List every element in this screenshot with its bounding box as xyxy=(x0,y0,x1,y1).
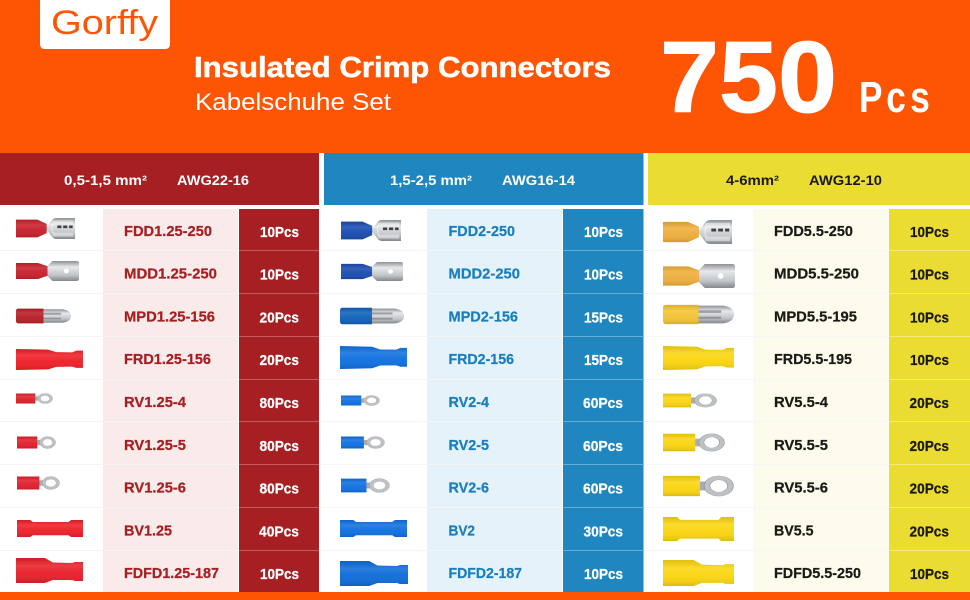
row: FDFD1.25-187: FDFD1.25-187 xyxy=(124,565,219,582)
row: RV1.25-4: 80Pcs xyxy=(260,395,299,412)
row: RV1.25-5: RV1.25-5 xyxy=(124,437,186,454)
row: MPD5.5-195: 10Pcs xyxy=(910,310,949,326)
subtitle: Kabelschuhe Set xyxy=(195,89,391,116)
row: RV1.25-4: RV1.25-4 xyxy=(124,394,187,411)
row: MPD5.5-195 xyxy=(663,305,949,326)
row: MDD2-250 xyxy=(341,262,623,284)
row: MPD1.25-156 xyxy=(16,308,299,326)
row: FRD1.25-156: FRD1.25-156 xyxy=(124,351,211,368)
row: FRD2-156: 15Pcs xyxy=(584,352,623,369)
row: FDD2-250 xyxy=(341,220,623,241)
row: RV5.5-5 xyxy=(663,434,949,455)
row: BV5.5: 20Pcs xyxy=(910,524,949,540)
row: BV1.25 xyxy=(17,520,299,540)
row: FRD2-156 xyxy=(340,346,623,369)
row: RV5.5-6: RV5.5-6 xyxy=(774,480,828,496)
row: FDFD5.5-250 xyxy=(663,560,949,586)
row: MDD2-250: MDD2-250 xyxy=(448,266,520,282)
row: FDD1.25-250 xyxy=(16,218,299,241)
row: RV5.5-6 xyxy=(663,476,949,498)
row: MDD2-250: 10Pcs xyxy=(584,266,623,284)
row: RV1.25-4 xyxy=(16,393,299,412)
row: FRD5.5-195 xyxy=(663,346,949,370)
row: FRD5.5-195: 10Pcs xyxy=(910,352,949,369)
row: BV5.5 xyxy=(663,517,949,541)
row: BV5.5: BV5.5 xyxy=(774,522,814,540)
row: MDD5.5-250: MDD5.5-250 xyxy=(774,266,859,282)
row: RV5.5-5: 20Pcs xyxy=(910,438,949,455)
row: RV5.5-5: RV5.5-5 xyxy=(774,437,828,454)
row: FDD5.5-250 xyxy=(663,220,949,244)
header: blue column: AWG16-14 xyxy=(502,173,576,188)
row: MDD5.5-250: 10Pcs xyxy=(910,266,949,284)
panel: 4-6 mm² yellow column xyxy=(644,153,970,592)
row: MDD1.25-250 xyxy=(16,261,299,284)
logo badge: Gorffy xyxy=(51,4,158,42)
header: blue column xyxy=(390,173,576,188)
panel: 0,5-1,5 mm² red column xyxy=(0,153,319,592)
row: MPD1.25-156: 20Pcs xyxy=(260,310,299,326)
row: FDFD2-187: 10Pcs xyxy=(584,566,623,583)
row: RV5.5-4: RV5.5-4 xyxy=(774,394,829,411)
row: FDD1.25-250: 10Pcs xyxy=(260,224,299,241)
row: FDFD5.5-250: 10Pcs xyxy=(910,566,949,583)
header: yellow column: 4-6mm² xyxy=(726,173,780,188)
row: FRD1.25-156: 20Pcs xyxy=(260,352,299,369)
header: red column xyxy=(64,173,250,188)
row: MPD2-156: 15Pcs xyxy=(584,310,623,326)
orange header band xyxy=(0,0,970,153)
row: MDD5.5-250 xyxy=(663,264,949,288)
row: RV2-6: RV2-6 xyxy=(448,480,489,496)
title: Insulated Crimp Connectors xyxy=(194,52,611,84)
header: blue column: 1,5-2,5 mm² xyxy=(390,173,473,188)
row: RV2-5: 60Pcs xyxy=(583,438,623,455)
row: RV2-4: RV2-4 xyxy=(448,394,490,411)
row: MDD1.25-250: 10Pcs xyxy=(260,266,299,284)
row: RV2-6 xyxy=(341,479,623,498)
row: BV1.25: 40Pcs xyxy=(259,524,299,540)
row: MPD5.5-195: MPD5.5-195 xyxy=(774,308,857,326)
row: RV2-6: 60Pcs xyxy=(583,480,623,498)
row: FDFD1.25-187 xyxy=(16,558,299,583)
header: yellow column xyxy=(726,173,882,188)
row: RV1.25-6: 80Pcs xyxy=(260,480,299,498)
row: FDFD2-187: FDFD2-187 xyxy=(448,565,522,582)
header: yellow column: AWG12-10 xyxy=(809,173,882,188)
row: FDFD5.5-250: FDFD5.5-250 xyxy=(774,565,861,582)
row: RV1.25-5: 80Pcs xyxy=(260,438,299,455)
header: red column: AWG22-16 xyxy=(177,173,250,188)
row: BV2: 30Pcs xyxy=(584,524,623,540)
row: BV2: BV2 xyxy=(448,522,475,540)
panel: 1,5-2,5 mm² blue column xyxy=(320,153,644,592)
row: MPD2-156 xyxy=(340,308,623,326)
row: RV2-5: RV2-5 xyxy=(448,437,489,454)
row: RV1.25-6 xyxy=(17,477,299,498)
row: MPD1.25-156: MPD1.25-156 xyxy=(124,308,215,326)
row: RV5.5-6: 20Pcs xyxy=(910,480,949,498)
row: RV2-5 xyxy=(341,437,623,455)
total unit: Pcs xyxy=(859,73,930,122)
row: FRD2-156: FRD2-156 xyxy=(448,351,514,368)
row: FRD5.5-195: FRD5.5-195 xyxy=(774,351,852,368)
row: FDD2-250: 10Pcs xyxy=(584,224,623,241)
row: FDD5.5-250: 10Pcs xyxy=(910,224,949,241)
row: RV1.25-6: RV1.25-6 xyxy=(124,480,186,496)
row: RV5.5-4: 20Pcs xyxy=(910,395,949,412)
row: MDD1.25-250: MDD1.25-250 xyxy=(124,266,217,282)
row: RV5.5-4 xyxy=(663,394,949,412)
total count: 750 xyxy=(660,22,837,134)
row: FRD1.25-156 xyxy=(16,349,299,370)
row: FDFD2-187 xyxy=(340,561,623,586)
orange footer band xyxy=(0,592,970,600)
row: RV2-4: 60Pcs xyxy=(583,395,623,412)
row: FDFD1.25-187: 10Pcs xyxy=(260,566,299,583)
logo badge xyxy=(40,0,170,49)
row: BV1.25: BV1.25 xyxy=(124,522,172,540)
row: BV2 xyxy=(340,520,623,540)
row: FDD5.5-250: FDD5.5-250 xyxy=(774,223,853,240)
row: FDD1.25-250: FDD1.25-250 xyxy=(124,223,212,240)
row: MPD2-156: MPD2-156 xyxy=(448,308,518,326)
row: FDD2-250: FDD2-250 xyxy=(448,223,515,240)
row: RV1.25-5 xyxy=(17,437,299,455)
row: RV2-4 xyxy=(341,394,623,412)
header: red column: 0,5-1,5 mm² xyxy=(64,173,148,188)
